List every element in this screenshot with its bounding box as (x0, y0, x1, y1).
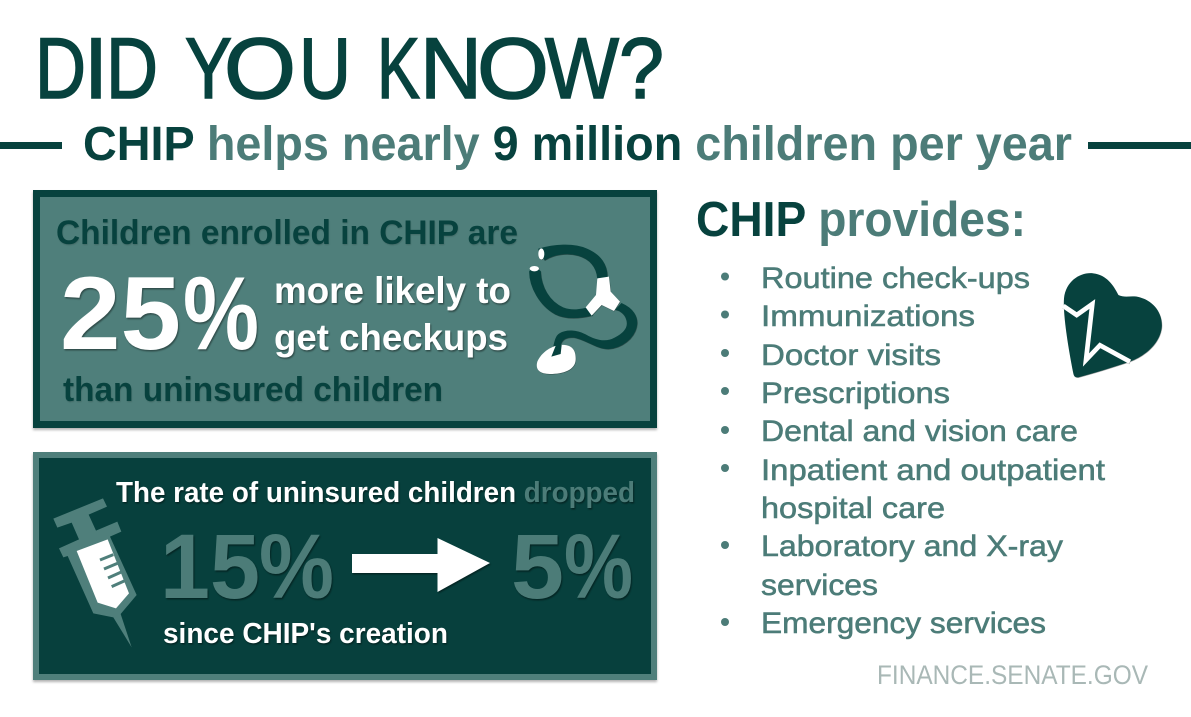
list of services: Immunizations (761, 300, 975, 333)
panel: uninsured rate (36, 455, 654, 677)
title: I (84, 21, 108, 117)
text: since CHIP's creation: since CHIP's creation (163, 618, 448, 650)
statistic: 5%: % (564, 516, 633, 618)
heading: CHIP provides: CHIP provides: (696, 193, 1026, 247)
text: more likely to get checkups: more likely to (274, 270, 511, 311)
statistic: 15% (160, 516, 334, 618)
panel heading: The rate of uninsured children dropped (116, 477, 635, 509)
panel heading: Children enrolled in CHIP are (56, 214, 518, 252)
list of services: Routine check-ups (761, 262, 1030, 295)
icon: syringe (53, 498, 137, 647)
text: more likely to get checkups (274, 270, 511, 358)
text: than uninsured children: than uninsured children (63, 371, 443, 409)
statistic: 25% (60, 256, 259, 372)
list of services: Prescriptions (761, 377, 950, 410)
title: K (377, 21, 420, 117)
statistic: 25%: % (183, 256, 259, 372)
list of services (721, 262, 1106, 640)
icon: stethoscope (530, 245, 636, 374)
title (35, 21, 664, 117)
title: D (106, 21, 158, 117)
list of services: services (761, 569, 878, 602)
title: O (224, 21, 296, 117)
title: U (299, 21, 351, 117)
title: ? (619, 21, 664, 117)
title: Y (185, 21, 232, 117)
title: O (477, 21, 549, 117)
title: D (35, 21, 86, 117)
list of services: Inpatient and outpatient (761, 454, 1106, 487)
panel: checkups (36, 194, 654, 424)
list of services: Laboratory and X-ray (761, 530, 1063, 563)
source: finance.senate.gov: FINANCE.SENATE.GOV (877, 660, 1148, 690)
statistic: 25%: 25 (60, 256, 181, 372)
list of services: hospital care (761, 492, 945, 525)
title: W (545, 21, 619, 117)
icon: heart with pulse (1063, 273, 1162, 377)
list of services: Emergency services (761, 607, 1046, 640)
subtitle with side rules: CHIP helps nearly 9 million children per year (83, 118, 1072, 171)
title: N (420, 21, 482, 117)
statistic: 15%: 15 (160, 516, 260, 618)
statistic: 5% (511, 516, 633, 618)
list of services: Dental and vision care (761, 415, 1078, 448)
statistic: 5%: 5 (511, 516, 564, 618)
arrow (352, 538, 490, 592)
list of services: Doctor visits (761, 339, 941, 372)
text: more likely to get checkups: get checkups (274, 317, 508, 358)
statistic: 15%: % (259, 516, 334, 618)
